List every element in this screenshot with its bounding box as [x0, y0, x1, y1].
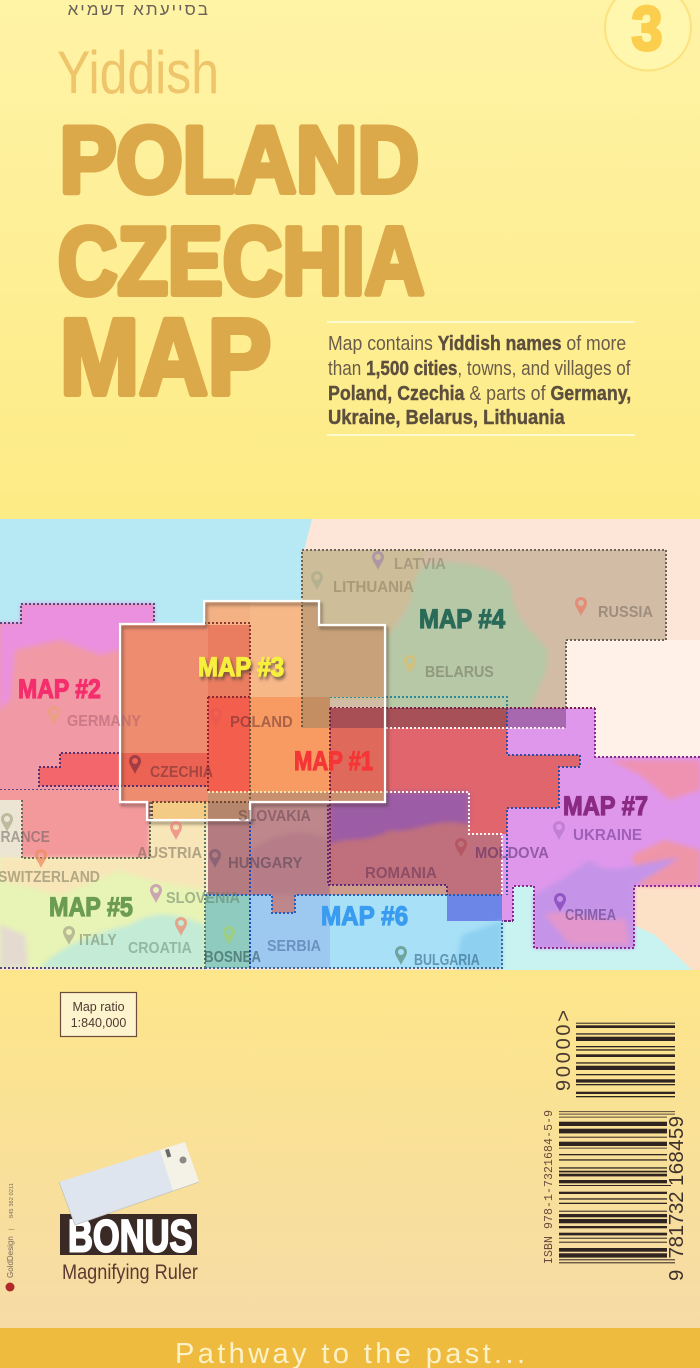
barcode: isbn: ISBN 978-1-7321684-5-9: [543, 1110, 556, 1264]
region: map 2: [0, 601, 157, 858]
country labels: BOSNEA: [204, 949, 261, 966]
title: MAP: [60, 296, 271, 417]
region: map 5: [0, 800, 205, 968]
country labels: MOLDOVA: [475, 844, 549, 862]
map labels: MAP #2: [18, 674, 101, 704]
region: map 3 overlap: [120, 601, 385, 802]
country labels: SWITZERLAND: [0, 868, 100, 886]
barcode: isbn: 168459: [665, 1116, 688, 1186]
barcode: price: [553, 1010, 675, 1097]
ruler caption: Magnifying Ruler: [62, 1261, 198, 1284]
country labels: ROMANIA: [365, 865, 437, 882]
description text block: Poland, Czechia & parts of Germany,: [328, 383, 631, 405]
publisher credit: |: [9, 1228, 15, 1230]
country labels: AUSTRIA: [137, 844, 202, 862]
country labels: UKRAINE: [573, 827, 642, 844]
country labels: CZECHIA: [150, 763, 213, 781]
country labels: [0, 555, 653, 969]
map ratio box: Map ratio: [72, 1000, 125, 1014]
ruler illustration: [59, 1142, 199, 1225]
country labels: BELARUS: [425, 663, 494, 681]
country labels: BULGARIA: [414, 952, 480, 969]
map labels: MAP #3: [198, 653, 284, 682]
country labels: CROATIA: [128, 939, 192, 957]
region: map 6: [205, 802, 502, 968]
country labels: CRIMEA: [565, 907, 617, 924]
country labels: SLOVENIA: [166, 889, 240, 907]
title: Yiddish: [57, 39, 219, 106]
description text block: Map contains Yiddish names of more: [328, 332, 626, 354]
map 3 white frame: [120, 601, 385, 820]
country labels: SLOVAKIA: [238, 807, 311, 825]
title: [57, 39, 424, 417]
country labels: POLAND: [230, 714, 293, 731]
bottom yellow background: [0, 970, 700, 1328]
region: map 7: [502, 708, 700, 948]
map ratio box: [60, 992, 136, 1036]
publisher credit: GoldDesign: [6, 1236, 15, 1278]
map labels: MAP #7: [563, 792, 648, 821]
description text block: Ukraine, Belarus, Lithuania: [328, 407, 565, 429]
map labels: MAP #5: [49, 892, 133, 922]
country labels: ITALY: [79, 931, 117, 949]
region: map 4: [301, 549, 667, 708]
map labels: MAP #1: [294, 747, 373, 777]
description text block: [327, 321, 635, 436]
dotted boundaries: [39, 601, 385, 885]
title: CZECHIA: [58, 207, 424, 314]
region: map 1 east: [302, 697, 595, 895]
map ratio box: 1:840,000: [71, 1016, 126, 1030]
country labels: RUSSIA: [598, 603, 653, 621]
country labels: LITHUANIA: [333, 579, 414, 596]
top yellow background: [0, 0, 700, 519]
barcode: isbn: [543, 1110, 688, 1281]
country labels: HUNGARY: [228, 855, 303, 872]
publisher credit: 845 362 0211: [9, 1183, 15, 1218]
map labels: MAP #6: [321, 902, 408, 931]
map panel: [0, 519, 700, 970]
barcode: isbn: 781732: [665, 1192, 688, 1258]
barcode: price: 90000>: [553, 1010, 575, 1091]
region: slovakia and hungary: [152, 802, 330, 913]
description text block: than 1,500 cities, towns, and villages of: [328, 357, 631, 379]
map labels: MAP #4: [419, 605, 506, 634]
badge: volume 3: [605, 0, 691, 70]
region: romania: [328, 792, 513, 921]
bonus label: BONUS: [68, 1212, 192, 1262]
footer band: [0, 1328, 700, 1368]
country labels: LATVIA: [394, 555, 446, 573]
map labels: [18, 605, 648, 931]
land and sea base: [0, 519, 700, 970]
publisher credit: [6, 1183, 15, 1292]
hebrew header: בסייעתא דשמיא: [68, 0, 210, 19]
country labels: GERMANY: [67, 712, 141, 730]
bonus: magnifying ruler: [59, 1142, 199, 1284]
barcode: isbn: 9: [665, 1270, 688, 1281]
title: POLAND: [60, 107, 419, 212]
red strip: [39, 753, 120, 786]
location pins: [1, 551, 587, 965]
country labels: SERBIA: [267, 937, 321, 955]
